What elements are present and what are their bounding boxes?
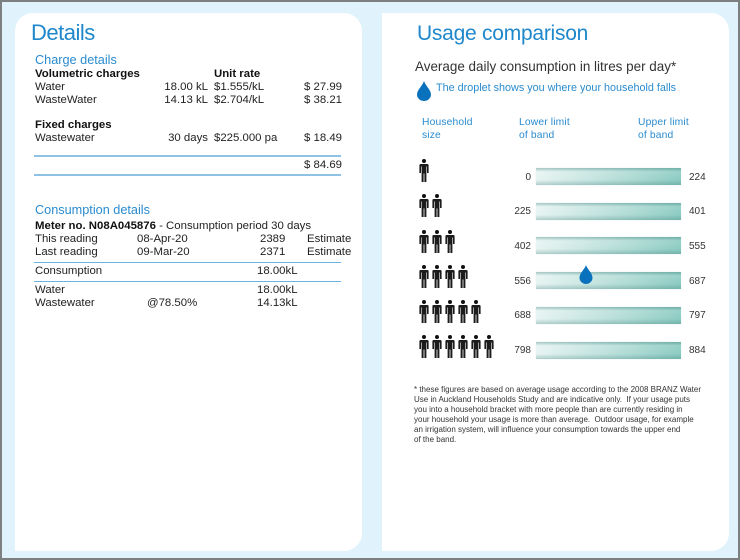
row: this reading: This reading	[35, 233, 98, 245]
row: water: Water	[35, 81, 65, 93]
row: wastewater: 14.13 kL	[164, 94, 208, 106]
panel: usage comparison	[382, 13, 729, 551]
column headings: Unit rate	[214, 68, 260, 80]
row: 4 people	[419, 265, 706, 290]
column headings: Volumetric charges	[35, 68, 140, 80]
column heading: upper limit	[638, 117, 689, 141]
icon: people	[419, 265, 468, 288]
heading: usage comparison: Usage comparison	[417, 22, 588, 45]
column heading: lower limit	[519, 117, 570, 141]
lower limit: 798	[514, 345, 531, 356]
row: last reading: Last reading	[35, 246, 98, 258]
footnote: of the band.	[414, 435, 456, 444]
band bar	[536, 342, 681, 359]
heading: charge details: Charge details	[35, 53, 117, 67]
footnote: Use in Auckland Households Study and are indicative only. If your usage puts	[414, 395, 690, 404]
row: water: $ 27.99	[304, 81, 342, 93]
row: water: 18.00 kL	[164, 81, 208, 93]
row: this reading	[35, 233, 351, 245]
row: last reading: 2371	[260, 246, 285, 258]
column heading: household size: size	[422, 130, 441, 141]
footnote: you into a household bracket with more people than are currently residing in	[414, 405, 683, 414]
row: this reading: 08-Apr-20	[137, 233, 188, 245]
row: 5 people	[419, 300, 706, 324]
column heading: upper limit: Upper limit	[638, 117, 689, 128]
meter number: Meter no. N08A045876 - Consumption period 30 days	[35, 220, 311, 232]
heading: fixed charges: Fixed charges	[35, 119, 112, 131]
band bar	[536, 168, 681, 185]
row: wastewater	[35, 94, 342, 106]
row: wastewater: Wastewater	[35, 297, 95, 309]
row: 3 people	[419, 230, 706, 254]
row: water: $1.555/kL	[214, 81, 264, 93]
icon: people	[419, 194, 442, 217]
upper limit: 687	[689, 276, 706, 287]
row: water: 18.00kL	[257, 284, 298, 296]
footnote	[414, 385, 701, 444]
footnote: your household your usage is more than average. Outdoor usage, for example	[414, 415, 694, 424]
row: fixed wastewater: Wastewater	[35, 132, 95, 144]
heading: details: Details	[31, 20, 95, 45]
lower limit: 688	[514, 310, 531, 321]
section: consumption details	[34, 203, 351, 309]
row: water: Water	[35, 284, 65, 296]
band bar	[536, 203, 681, 220]
upper limit: 555	[689, 241, 706, 252]
upper limit: 884	[689, 345, 706, 356]
legend text: The droplet shows you where your household falls	[436, 82, 676, 94]
row: consumption: 18.00kL	[257, 265, 298, 277]
band bar	[536, 272, 681, 289]
row: 2 people	[419, 194, 706, 220]
row: last reading: 09-Mar-20	[137, 246, 190, 258]
subheading: Average daily consumption in litres per day*	[415, 59, 676, 74]
column heading: household size: Household	[422, 117, 473, 128]
icon: people	[419, 335, 494, 358]
lower limit: 556	[514, 276, 531, 287]
lower limit: 0	[525, 172, 531, 183]
row: last reading	[35, 246, 351, 258]
row: fixed wastewater: 30 days	[168, 132, 208, 144]
row: water	[35, 81, 342, 93]
footnote: * these figures are based on average usage according to the 2008 BRANZ Water	[414, 385, 701, 394]
row: 6 people	[419, 335, 706, 360]
column heading: lower limit: of band	[519, 130, 554, 141]
icon: people	[419, 159, 429, 182]
row: 1 person	[419, 159, 706, 186]
footnote: an irrigation system, will influence your consumption towards the upper end	[414, 425, 680, 434]
upper limit: 797	[689, 310, 706, 321]
row: fixed wastewater: $225.000 pa	[214, 132, 277, 144]
row: consumption: Consumption	[35, 265, 102, 277]
band bar	[536, 237, 681, 254]
lower limit: 225	[514, 206, 531, 217]
row: wastewater: $ 38.21	[304, 94, 342, 106]
row: wastewater: @78.50%	[147, 297, 197, 309]
icon: people	[419, 230, 455, 253]
band bar	[536, 307, 681, 324]
icon: people	[419, 300, 481, 323]
row: this reading: Estimate	[307, 233, 351, 245]
column heading: household size	[422, 117, 473, 141]
row: fixed wastewater	[35, 132, 342, 144]
section: charge details	[34, 53, 342, 176]
row: fixed wastewater: $ 18.49	[304, 132, 342, 144]
row: last reading: Estimate	[307, 246, 351, 258]
total: $ 84.69	[304, 159, 342, 171]
icon: legend droplet	[417, 81, 431, 101]
row: consumption	[35, 265, 298, 277]
row: this reading: 2389	[260, 233, 285, 245]
row: water	[35, 284, 298, 296]
row: wastewater: $2.704/kL	[214, 94, 264, 106]
upper limit: 224	[689, 172, 706, 183]
column heading: lower limit: Lower limit	[519, 117, 570, 128]
row: wastewater	[35, 297, 298, 309]
upper limit: 401	[689, 206, 706, 217]
panel: details	[15, 13, 362, 551]
row: wastewater: WasteWater	[35, 94, 97, 106]
row: wastewater: 14.13kL	[257, 297, 298, 309]
column heading: upper limit: of band	[638, 130, 673, 141]
column headings	[35, 68, 260, 80]
icon: household droplet	[580, 265, 592, 284]
heading: consumption details: Consumption details	[35, 203, 150, 217]
lower limit: 402	[514, 241, 531, 252]
